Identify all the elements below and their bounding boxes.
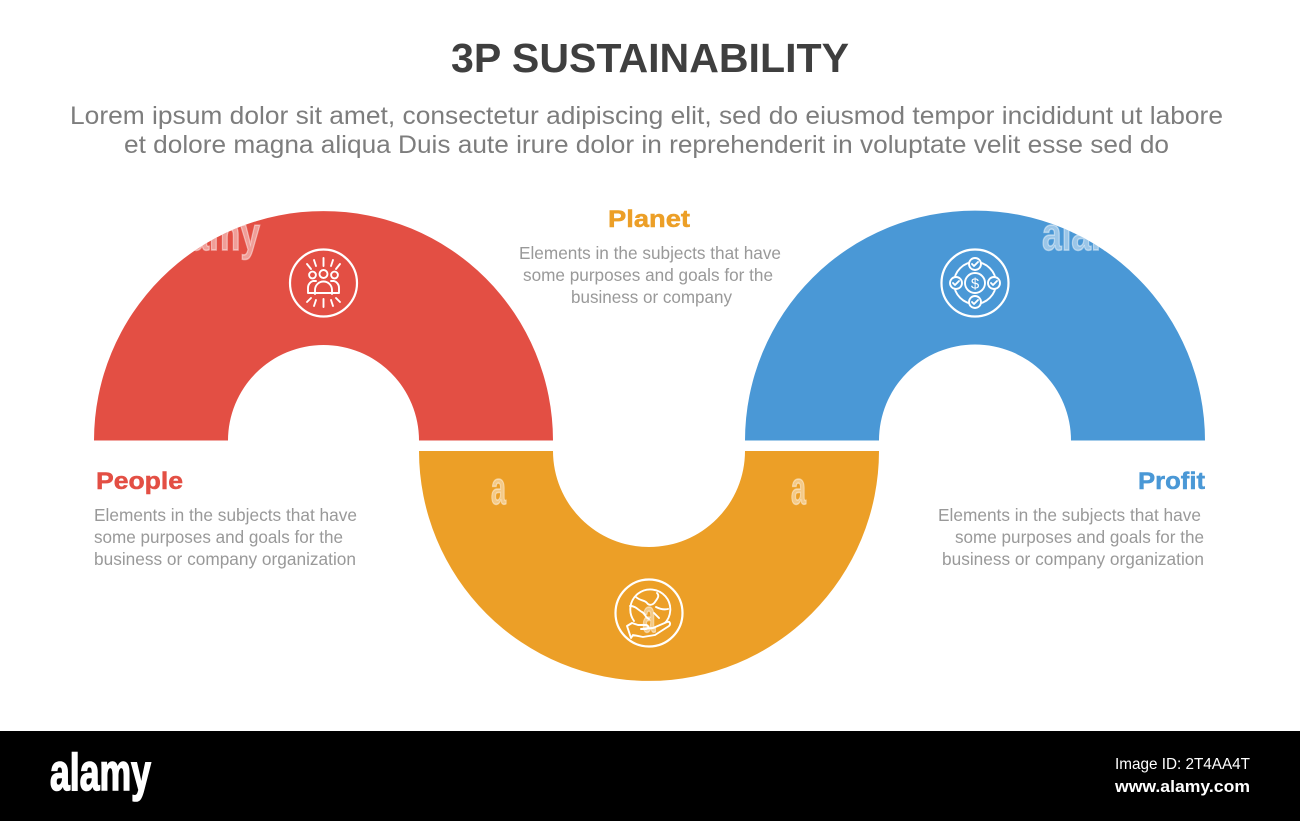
subtitle text: et dolore magna aliqua Duis aute irure dolor in reprehenderit in voluptate velit esse sed do: [124, 131, 1169, 159]
text block: planet: [519, 243, 781, 307]
icon: globe in hand: [616, 580, 682, 646]
icon: globe in hand: a: [642, 590, 656, 642]
watermark footer bar: Image ID: 2T4AA4T: [1115, 756, 1250, 773]
panel: profit arch: [745, 208, 1205, 440]
watermark footer bar: [0, 731, 1300, 821]
panel: planet arch: [419, 451, 879, 681]
heading: planet: Planet: [608, 206, 690, 233]
text block: people: some purposes and goals for the: [94, 527, 343, 547]
text block: people: [94, 505, 357, 569]
panel: planet arch: a: [491, 462, 506, 514]
panel: planet arch: a: [791, 462, 806, 514]
panel: profit arch: alamy: [1042, 208, 1142, 260]
text block: profit: Elements in the subjects that have: [938, 505, 1201, 525]
icon: dollar with checks: [942, 250, 1008, 316]
subtitle text: Lorem ipsum dolor sit amet, consectetur adipiscing elit, sed do eiusmod tempor incididunt ut labore: [70, 102, 1223, 130]
panel: people arch: [94, 208, 553, 440]
heading: people: People: [96, 468, 183, 495]
panel: people arch: alamy: [160, 208, 260, 260]
title: 3P SUSTAINABILITY: [451, 35, 849, 81]
icon: dollar with checks: $: [971, 276, 980, 292]
subtitle text: [70, 102, 1223, 159]
text block: planet: Elements in the subjects that have: [519, 243, 781, 263]
text block: people: Elements in the subjects that have: [94, 505, 357, 525]
text block: profit: business or company organization: [942, 549, 1204, 569]
text block: planet: some purposes and goals for the: [523, 265, 773, 285]
watermark footer bar: alamy: [50, 744, 151, 802]
watermark footer bar: www.alamy.com: [1114, 777, 1250, 796]
text block: profit: [938, 505, 1204, 569]
text block: profit: some purposes and goals for the: [955, 527, 1204, 547]
heading: profit: Profit: [1138, 468, 1205, 495]
text block: people: business or company organization: [94, 549, 356, 569]
icon: people group: [290, 250, 357, 316]
text block: planet: business or company: [571, 287, 732, 307]
